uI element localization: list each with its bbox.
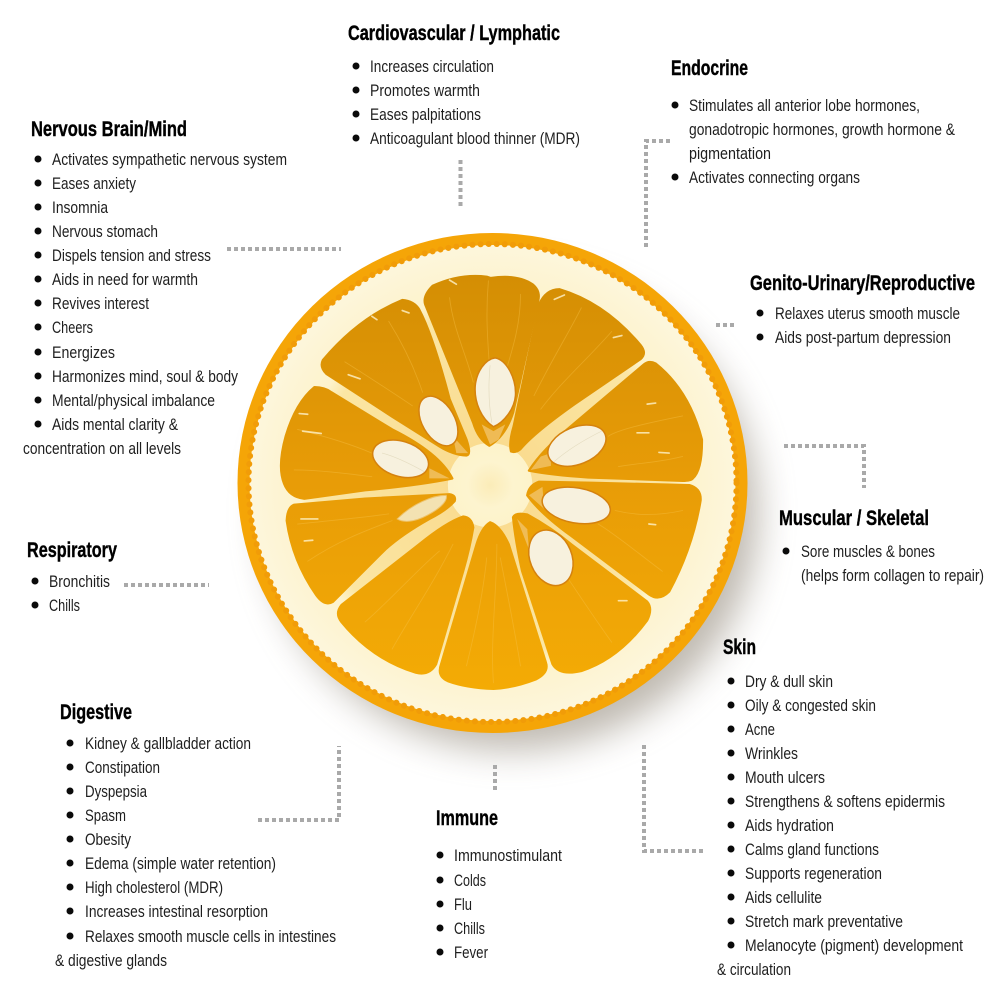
list [23, 151, 287, 458]
list: pigmentation [689, 145, 771, 163]
heading: Endocrine [671, 57, 748, 80]
icon: orange slice [238, 233, 758, 750]
list: Activates sympathetic nervous system [52, 151, 287, 169]
list [672, 97, 955, 187]
heading: Cardiovascular / Lymphatic [348, 22, 560, 45]
panel: cardiovascular / lymphatic [348, 22, 580, 148]
list: Cheers [52, 319, 93, 337]
list: Promotes warmth [370, 82, 480, 100]
panel: nervous brain/mind [23, 118, 287, 458]
list: Sore muscles & bones [801, 543, 935, 561]
list: Edema (simple water retention) [85, 855, 276, 873]
connector: nervous [227, 247, 341, 251]
list: Chills [49, 597, 80, 615]
list: Insomnia [52, 199, 109, 217]
list: Aids hydration [745, 817, 834, 835]
panel: skin [717, 636, 963, 979]
connector: skin [644, 745, 704, 851]
list: Immunostimulant [454, 847, 562, 865]
list [32, 573, 110, 615]
list: Relaxes uterus smooth muscle [775, 305, 960, 323]
connector: respiratory [124, 583, 209, 587]
list: Colds [454, 872, 486, 890]
connector: cardiovascular [458, 160, 462, 208]
list: Kidney & gallbladder action [85, 735, 251, 753]
list: Flu [454, 896, 472, 914]
seeds [368, 358, 613, 592]
list: Mental/physical imbalance [52, 392, 215, 410]
list: Increases circulation [370, 58, 494, 76]
list: Aids post-partum depression [775, 329, 951, 347]
panel: respiratory [27, 539, 117, 615]
list [717, 673, 963, 979]
list: Obesity [85, 831, 132, 849]
connector: immune [493, 765, 497, 793]
list: Bronchitis [49, 573, 110, 591]
list: Stretch mark preventative [745, 913, 903, 931]
heading: Muscular / Skeletal [779, 507, 929, 530]
list: Supports regeneration [745, 865, 882, 883]
panel: endocrine [671, 57, 955, 187]
list: Eases anxiety [52, 175, 137, 193]
list: Acne [745, 721, 775, 739]
list: Chills [454, 920, 485, 938]
list: Fever [454, 944, 488, 962]
list: Oily & congested skin [745, 697, 876, 715]
connector: endocrine [646, 141, 672, 247]
list: Eases palpitations [370, 106, 481, 124]
list: & digestive glands [55, 952, 167, 970]
heading: Respiratory [27, 539, 117, 562]
panel: immune [436, 807, 562, 962]
list: Stimulates all anterior lobe hormones, [689, 97, 920, 115]
list: & circulation [717, 961, 791, 979]
panel: genito-urinary/reproductive [750, 272, 975, 347]
list: Constipation [85, 759, 160, 777]
connector: muscular [784, 446, 864, 488]
list: Calms gland functions [745, 841, 879, 859]
heading: Digestive [60, 701, 132, 724]
list: Energizes [52, 344, 115, 362]
list: Dry & dull skin [745, 673, 833, 691]
list: Relaxes smooth muscle cells in intestines [85, 928, 336, 946]
list: High cholesterol (MDR) [85, 879, 223, 897]
connector: genito-urinary [716, 323, 737, 327]
list [756, 305, 960, 347]
list: Activates connecting organs [689, 169, 860, 187]
list: Revives interest [52, 295, 149, 313]
list: Wrinkles [745, 745, 798, 763]
panel: muscular / skeletal [779, 507, 984, 585]
list: Anticoagulant blood thinner (MDR) [370, 130, 580, 148]
list: Nervous stomach [52, 223, 158, 241]
panel: digestive [55, 701, 336, 970]
list [352, 58, 580, 148]
list: Aids mental clarity & [52, 416, 178, 434]
heading: Immune [436, 807, 498, 830]
heading: Nervous Brain/Mind [31, 118, 187, 141]
list: Harmonizes mind, soul & body [52, 368, 239, 386]
list: concentration on all levels [23, 440, 181, 458]
list: Aids in need for warmth [52, 271, 198, 289]
list: Mouth ulcers [745, 769, 825, 787]
list: Increases intestinal resorption [85, 903, 268, 921]
list: Dyspepsia [85, 783, 148, 801]
list: Spasm [85, 807, 126, 825]
list: gonadotropic hormones, growth hormone & [689, 121, 955, 139]
list: Dispels tension and stress [52, 247, 211, 265]
list [436, 847, 562, 962]
connector: digestive [258, 746, 339, 820]
heading: Skin [723, 636, 756, 659]
list [55, 735, 336, 970]
list: Strengthens & softens epidermis [745, 793, 945, 811]
list: Aids cellulite [745, 889, 822, 907]
list: Melanocyte (pigment) development [745, 937, 963, 955]
list [782, 543, 984, 585]
